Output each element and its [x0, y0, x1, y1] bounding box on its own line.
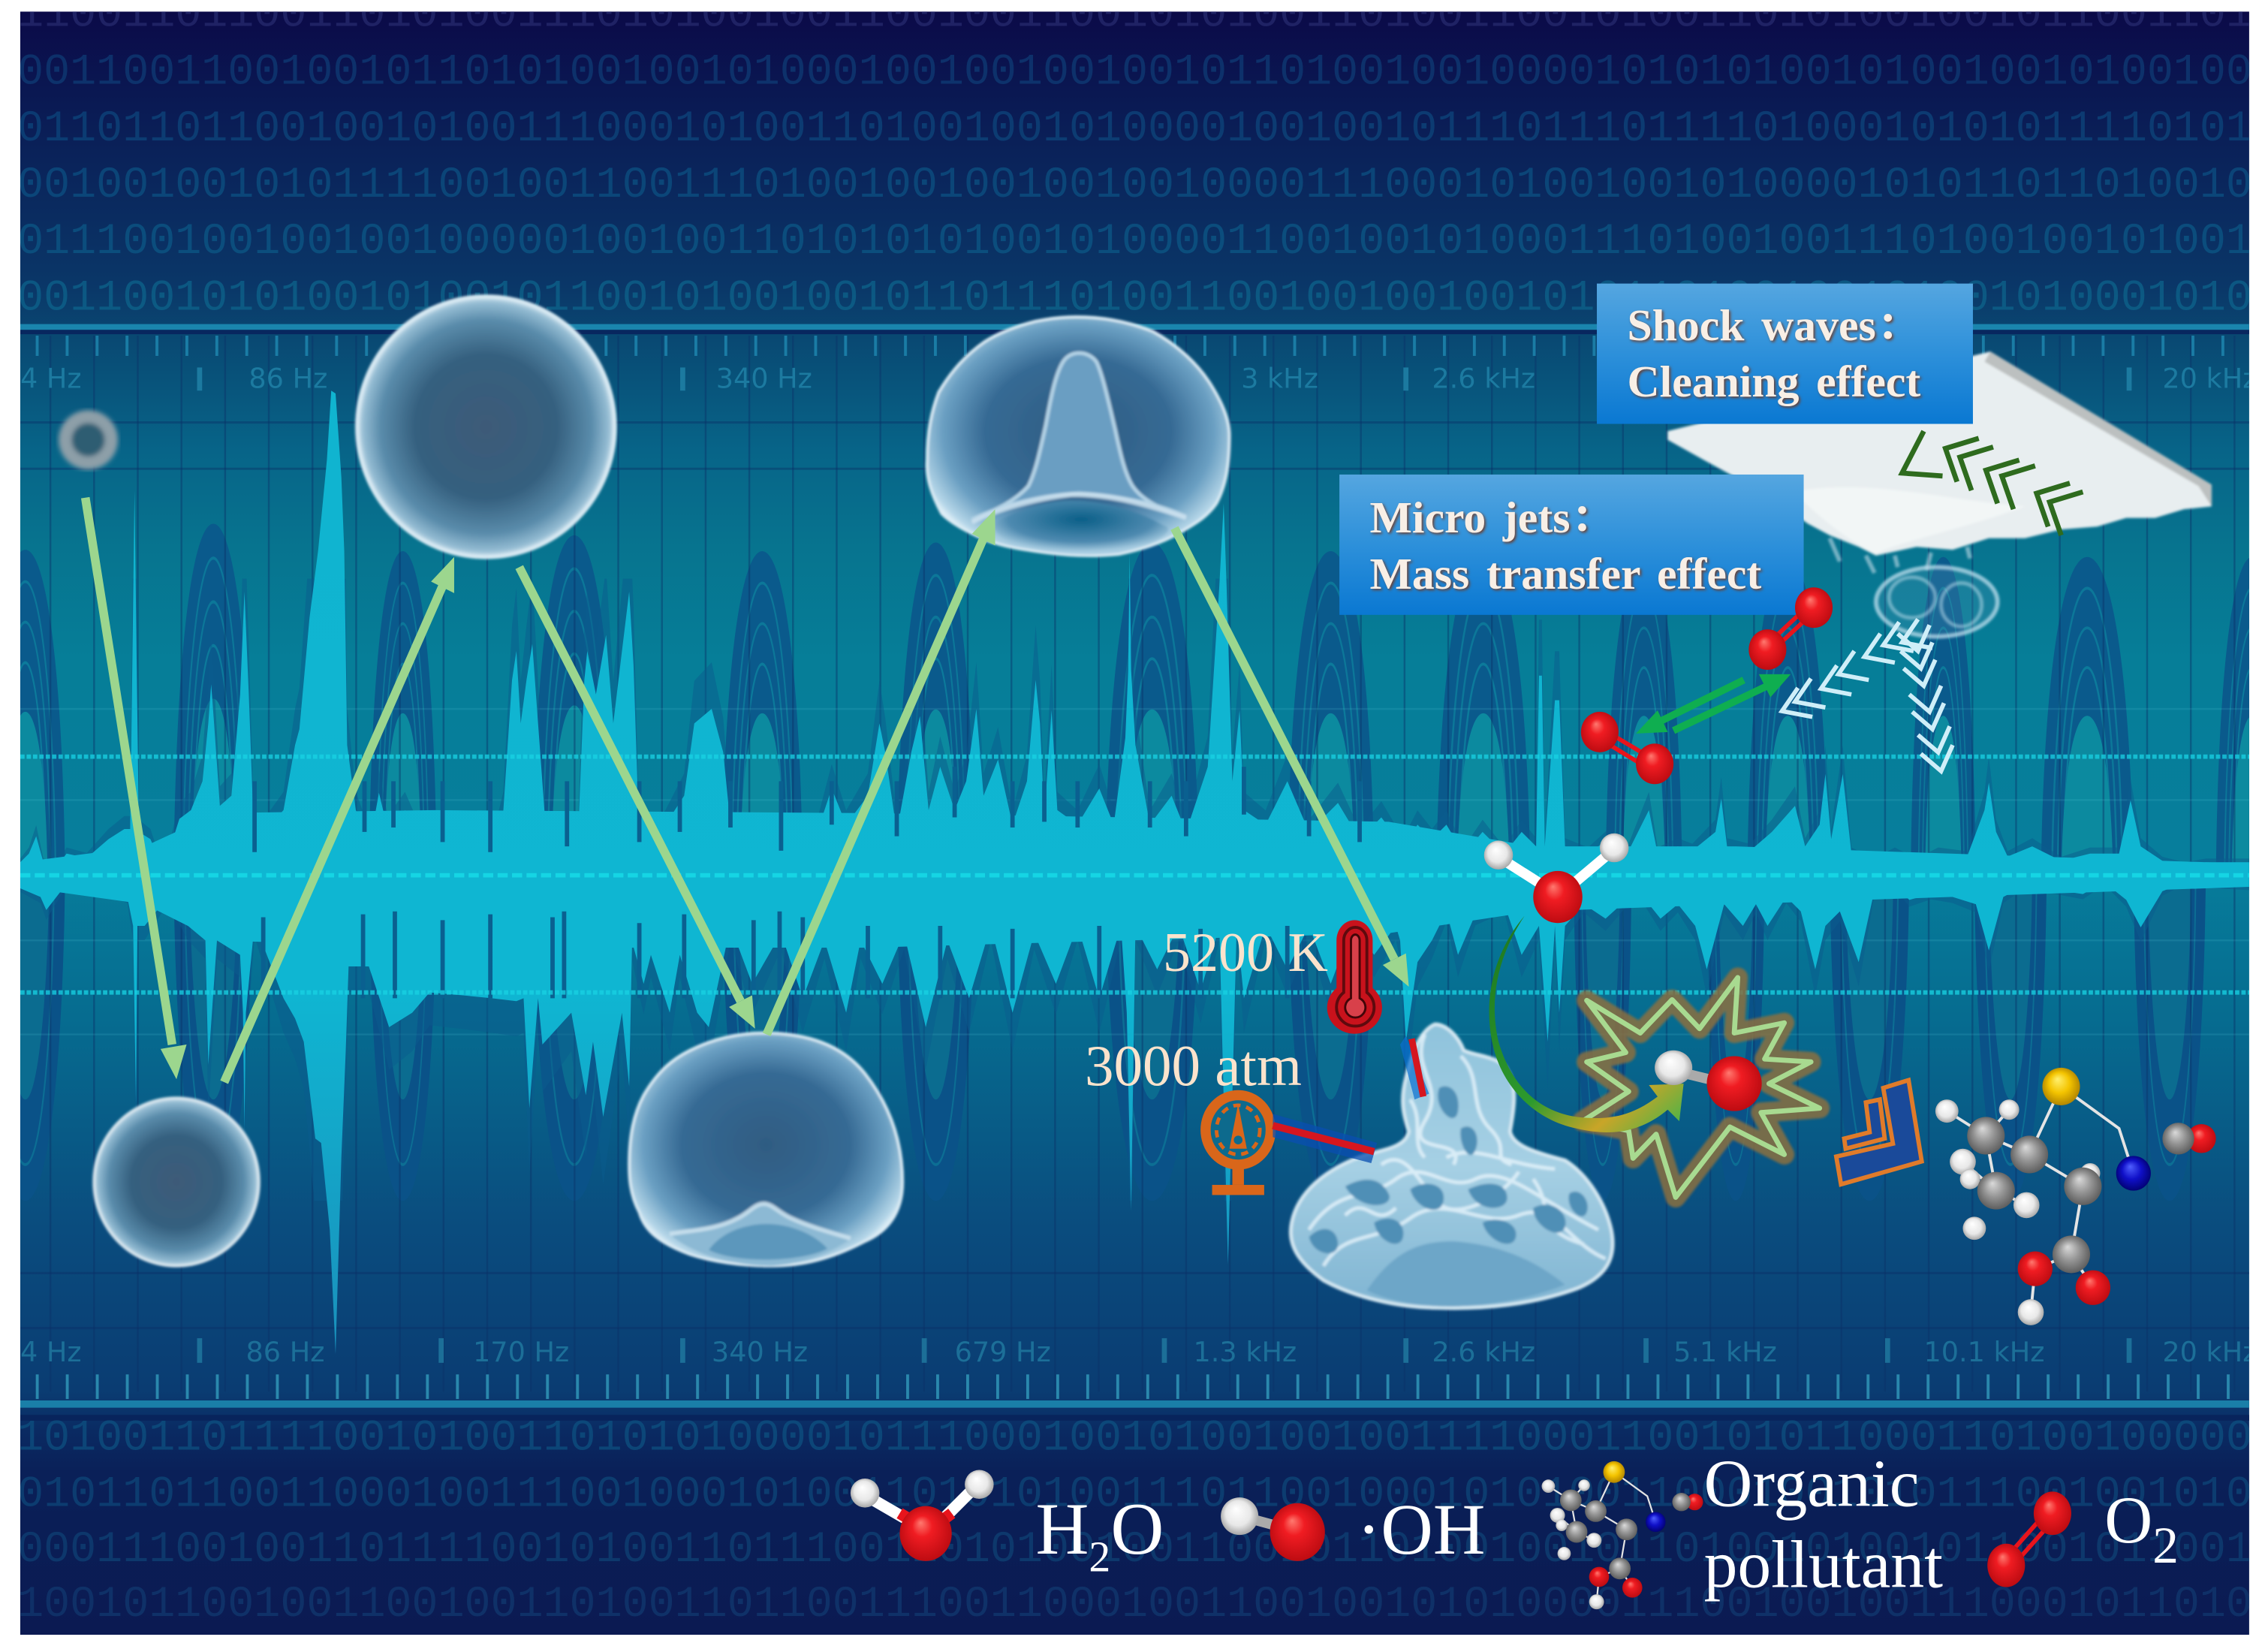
legend	[851, 1447, 2179, 1609]
legend label: water: 2	[1089, 1533, 1110, 1581]
legend label: oxygen: 2	[2152, 1517, 2179, 1575]
legend label: water: H	[1035, 1488, 1089, 1570]
molecule: water reactant	[1484, 834, 1628, 923]
molecule: lower O2	[1581, 712, 1673, 784]
molecule: organic pollutant	[1935, 1068, 2216, 1325]
bottom frequency ruler: 86 Hz	[246, 1336, 324, 1368]
legend label: organic pollutant: Organic	[1704, 1447, 1919, 1521]
callout: micro jets: Mass transfer effect	[1370, 549, 1761, 598]
bubble: collapse with burst jet	[1291, 1024, 1613, 1308]
bottom frequency ruler: 20 kHz	[2162, 1336, 2257, 1368]
binary text rows, top: 0011001010100101001011001010010010110111010011001001001001010110100100101001010001010	[17, 273, 2252, 323]
legend label: oxygen: O	[2104, 1484, 2152, 1557]
audio waveform	[20, 390, 2249, 1353]
radical burst star	[1583, 978, 1820, 1197]
legend label: organic pollutant	[1704, 1447, 1943, 1602]
legend icon: water	[851, 1470, 994, 1561]
top frequency ruler: 86 Hz	[248, 362, 327, 394]
label: temperature: 5200 K	[1163, 922, 1328, 984]
white chevrons toward oxygen	[1782, 620, 1932, 717]
arrow: expanded to dimpled bubble	[520, 567, 755, 1029]
bottom frequency ruler: 5.1 kHz	[1673, 1336, 1777, 1368]
curved reaction arrow	[1489, 916, 1684, 1132]
bottom frequency ruler: 340 Hz	[712, 1336, 808, 1368]
binary text rows, top	[17, 0, 2252, 323]
temperature pointer bar	[1400, 1036, 1429, 1099]
binary text rows, bottom: 1010011011110010100110101010000101110001001010010010011110001100101011000110100100000	[17, 1413, 2252, 1464]
legend icon: hydroxyl	[1221, 1497, 1325, 1561]
callout: shock waves: Shock waves：	[1627, 300, 1920, 350]
dark green shock chevrons	[1902, 431, 2083, 535]
bubble: fully expanded	[357, 297, 615, 557]
callout: micro jets: Micro jets：	[1370, 493, 1615, 542]
top frequency ruler: 4 Hz	[20, 362, 82, 394]
molecule: upper O2	[1748, 587, 1833, 670]
icon: pressure gauge	[1206, 1095, 1271, 1195]
top frequency ruler: 2.6 kHz	[1432, 362, 1535, 394]
arrow: nucleus to small bubble	[86, 498, 187, 1079]
arrow: small to expanded bubble	[224, 557, 454, 1082]
bottom frequency ruler: 170 Hz	[473, 1336, 569, 1368]
bubble: small spherical	[94, 1098, 259, 1266]
legend label: hydroxyl: ·OH	[1357, 1489, 1485, 1569]
callout: shock waves	[1597, 284, 1973, 424]
shock wave target plate	[1667, 351, 2212, 573]
bubble: tiny nucleus	[65, 417, 111, 463]
molecule: hydroxyl radical in burst	[1655, 1051, 1762, 1111]
bottom frequency ruler: 4 Hz	[20, 1336, 82, 1368]
bottom frequency ruler: 10.1 kHz	[1923, 1336, 2044, 1368]
binary text rows, bottom	[17, 1413, 2252, 1629]
callout: micro jets	[1339, 475, 1804, 615]
white chevrons downward	[1898, 625, 1953, 771]
legend label: organic pollutant: pollutant	[1704, 1528, 1943, 1602]
label: pressure: 3000 atm	[1085, 1033, 1302, 1098]
legend icon: organic pollutant	[1542, 1461, 1703, 1609]
arrow: oxygen exchange	[1636, 674, 1791, 734]
binary text rows, bottom: 1001011001001100100110100110110011100110001001100100101010000111001001001110001011010	[17, 1579, 2252, 1629]
spectrogram arches	[0, 523, 2268, 1201]
binary text rows, top: 0110110110010010100111000101001101001001010000100100101110111011110100010101011110101	[17, 104, 2252, 154]
top frequency ruler	[20, 324, 2257, 394]
bubble: tall central jet	[927, 317, 1230, 556]
residual bubble cloud	[1876, 567, 1998, 637]
bubble: early dimple	[629, 1033, 902, 1266]
top frequency ruler: 340 Hz	[716, 362, 812, 394]
binary text rows, bottom: 0101101100110001001110010001010011010101001110110010001010100110001001010111001001010	[17, 1470, 2252, 1520]
binary text rows, top: 0010010010101111001001100111010010010010010010000111000101001001010000101011011010010	[17, 160, 2252, 210]
legend label: water: O	[1110, 1488, 1164, 1570]
bottom frequency ruler: 2.6 kHz	[1432, 1336, 1535, 1368]
bottom frequency ruler: 679 Hz	[955, 1336, 1051, 1368]
legend icon: oxygen	[1987, 1491, 2071, 1587]
arrow: jet bubble to collapse	[1174, 528, 1409, 987]
callout: shock waves: Cleaning effect	[1627, 357, 1920, 406]
arrow: dimpled to jet bubble	[767, 509, 995, 1035]
top frequency ruler: 3 kHz	[1241, 362, 1318, 394]
icon: thermometer	[1327, 920, 1382, 1034]
binary text rows, bottom: 0001110010011011110010100110111001101010010011001011010010010110100101001011001011001	[17, 1524, 2252, 1575]
binary text rows, top: 0111001001001001000001001001101010101001010000110010010100011101001001110100100101001	[17, 216, 2252, 267]
bottom frequency ruler: 1.3 kHz	[1193, 1336, 1297, 1368]
bottom frequency ruler	[20, 1336, 2257, 1421]
pressure pointer bar	[1273, 1114, 1377, 1163]
icon: conversion double chevron	[1836, 1080, 1922, 1184]
top frequency ruler: 20 kHz	[2162, 362, 2257, 394]
binary text rows, top: 0011001100100101101010010010100010010010010010110100100100001010101001010010010100100	[17, 47, 2252, 98]
